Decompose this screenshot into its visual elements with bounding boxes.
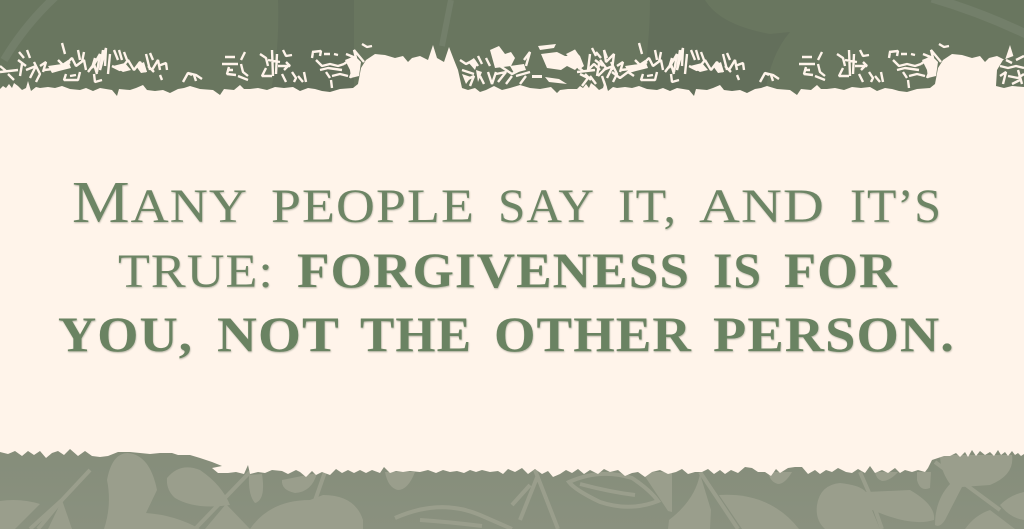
line 2: true: forgiveness is for: TRUE: (118, 245, 274, 298)
line 2: true: forgiveness is for: IS (713, 242, 762, 298)
line 1: many people say it, and it's: SAY (498, 180, 595, 233)
notch of green with flecks at right end (996, 52, 1024, 88)
line 1: many people say it, and it's (72, 169, 942, 235)
line 3: you, not the other person.: THE (360, 306, 472, 362)
line 1: many people say it, and it's: AND (699, 180, 825, 233)
line 2: true: forgiveness is for: FORGIVENESS (297, 242, 690, 298)
line 3: you, not the other person.: YOU, (58, 306, 193, 362)
torn bottom edge of cream panel (0, 440, 1024, 477)
quote text (58, 169, 955, 362)
line 1: many people say it, and it's: IT, (618, 180, 677, 233)
line 1: many people say it, and it's: PEOPLE (271, 180, 475, 233)
bottom banner: muted green leaf pattern (0, 445, 1024, 529)
line 1: many people say it, and it's: IT’S (850, 180, 942, 233)
line 3: you, not the other person. (58, 306, 955, 362)
line 2: true: forgiveness is for: FOR (784, 242, 898, 298)
cream centre panel with torn top edge and flecks (0, 43, 1024, 445)
line 1: many people say it, and it's: MANY (72, 169, 248, 235)
line 3: you, not the other person.: NOT (217, 306, 340, 362)
line 2: true: forgiveness is for (118, 242, 898, 298)
line 3: you, not the other person.: PERSON. (713, 306, 955, 362)
top banner: dark green leaf pattern (0, 0, 1024, 100)
line 3: you, not the other person.: OTHER (494, 306, 692, 362)
